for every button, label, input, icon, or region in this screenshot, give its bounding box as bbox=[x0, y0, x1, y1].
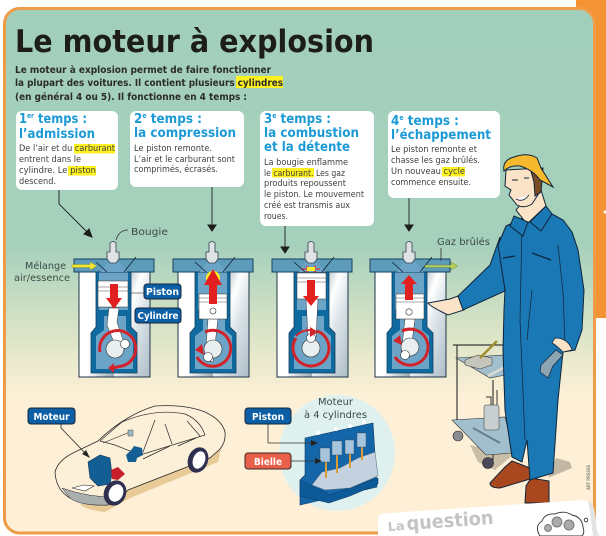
arrow: step 2 to cylinder 2 bbox=[208, 187, 216, 231]
car illustration bbox=[55, 406, 225, 512]
panel: step 2 compression bbox=[130, 111, 244, 187]
panel: step 4 exhaust: Le piston remonte et bbox=[391, 144, 478, 154]
panel: step 4 exhaust: chasse les gaz brûlés. bbox=[391, 155, 480, 165]
label: Gaz brûlés: Gaz brûlés bbox=[437, 236, 490, 248]
panel: step 1 admission: De l’air et du carburant bbox=[19, 143, 116, 153]
panel: step 3 combustion: et la détente bbox=[264, 139, 350, 155]
panel: step 2 compression: temps : bbox=[147, 111, 202, 127]
label: Cylindre bbox=[135, 308, 181, 323]
cylinder 1 admission bbox=[74, 242, 154, 377]
introduction: Le moteur à explosion permet de faire fonctionner bbox=[15, 65, 271, 76]
panel: step 1 admission: er bbox=[27, 112, 34, 120]
label: Piston: Piston bbox=[146, 287, 179, 298]
panel: step 1 admission bbox=[16, 111, 118, 190]
label: Piston engine: Piston bbox=[252, 412, 284, 423]
panel: step 2 compression: 2 bbox=[134, 111, 143, 127]
panel: step 1 admission: cylindre. Le piston bbox=[19, 165, 96, 175]
tool cart bbox=[452, 341, 514, 470]
panel: step 3 combustion: e bbox=[272, 112, 277, 120]
panel: step 3 combustion: 3 bbox=[264, 111, 273, 127]
panel: step 1 admission: l’admission bbox=[19, 126, 95, 142]
panel: step 4 exhaust: temps : bbox=[404, 113, 459, 129]
label: Bielle: Bielle bbox=[254, 457, 282, 468]
circle: 4-cylinder engine bbox=[279, 395, 395, 511]
cylinder 4 exhaust bbox=[370, 242, 450, 377]
panel: step 2 compression: e bbox=[142, 112, 147, 120]
question card bbox=[378, 500, 600, 536]
title: Le moteur à explosion bbox=[15, 24, 374, 60]
panel: step 4 exhaust: 4 bbox=[391, 113, 400, 129]
label: Piston engine bbox=[245, 408, 318, 446]
label: Moteur bbox=[28, 408, 90, 458]
label: Mélange air/essence: air/essence bbox=[14, 273, 70, 284]
panel: step 3 combustion: le carburant. Les gaz bbox=[264, 168, 346, 178]
label: Bougie bbox=[116, 227, 168, 240]
panel: step 4 exhaust: e bbox=[399, 114, 404, 122]
panel: step 3 combustion: le piston. Le mouvement bbox=[264, 189, 365, 199]
panel: step 4 exhaust: l’échappement bbox=[391, 127, 491, 143]
label: Moteur: Moteur bbox=[34, 412, 70, 423]
panel: step 1 admission: 1 bbox=[19, 111, 28, 127]
label: Cylindre: Cylindre bbox=[138, 311, 178, 322]
arrow: exhaust gas bbox=[425, 262, 458, 270]
credit: ART PRESSE bbox=[586, 465, 592, 490]
panel: step 3 combustion: La bougie enflamme bbox=[264, 157, 348, 167]
label: Piston bbox=[144, 284, 181, 299]
panel: step 2 compression: Le piston remonte. bbox=[134, 143, 212, 153]
panel: step 4 exhaust bbox=[388, 111, 500, 198]
panel: step 2 compression: L’air et le carburant sont bbox=[134, 154, 236, 164]
arrow: step 1 to cylinder 1 bbox=[59, 190, 92, 237]
introduction: la plupart des voitures. Il contient plusieurs cylindres bbox=[15, 78, 283, 89]
label: Bielle bbox=[245, 453, 322, 469]
label: Piston line bbox=[131, 292, 145, 294]
introduction: (en général 4 ou 5). Il fonctionne en 4 temps : bbox=[15, 92, 247, 103]
panel: step 3 combustion: produits repoussent bbox=[264, 178, 347, 188]
question card: La bbox=[387, 519, 405, 534]
circle: 4-cylinder engine: Moteur bbox=[318, 397, 354, 408]
panel: step 1 admission: descend. bbox=[19, 176, 56, 186]
arrow: step 4 to cylinder 4 bbox=[405, 198, 413, 231]
panel: step 3 combustion: temps : bbox=[276, 111, 331, 127]
panel: step 3 combustion: créé est transmis aux bbox=[264, 200, 350, 210]
cylinder 3 combustion bbox=[272, 242, 352, 377]
label: Mélange air/essence bbox=[14, 260, 70, 284]
panel: step 4 exhaust: Un nouveau cycle bbox=[391, 166, 465, 176]
panel: step 2 compression: la compression bbox=[134, 125, 236, 141]
label: Mélange air/essence: Mélange bbox=[25, 260, 66, 272]
panel: step 1 admission: temps : bbox=[34, 111, 87, 127]
label: Bougie: Bougie bbox=[131, 227, 168, 238]
icon: thought bubble with gears bbox=[537, 512, 588, 536]
cylinder 2 compression bbox=[173, 242, 253, 377]
panel: step 4 exhaust: commence ensuite. bbox=[391, 177, 471, 187]
panel: step 3 combustion: roues. bbox=[264, 211, 288, 221]
orange side tab bbox=[576, 0, 606, 318]
panel: step 2 compression: comprimés, écrasés. bbox=[134, 164, 218, 174]
question card: question bbox=[406, 507, 494, 535]
introduction bbox=[15, 65, 283, 103]
panel: step 3 combustion bbox=[260, 111, 374, 226]
arrow: step 3 to cylinder 3 bbox=[281, 226, 289, 253]
panel: step 3 combustion: la combustion bbox=[264, 125, 359, 141]
mechanic illustration bbox=[428, 155, 584, 503]
circle: 4-cylinder engine: à 4 cylindres bbox=[304, 409, 367, 421]
panel: step 1 admission: entrent dans le bbox=[19, 154, 81, 164]
arrow: fuel intake bbox=[72, 262, 97, 270]
label: Gaz brûlés bbox=[437, 236, 490, 261]
